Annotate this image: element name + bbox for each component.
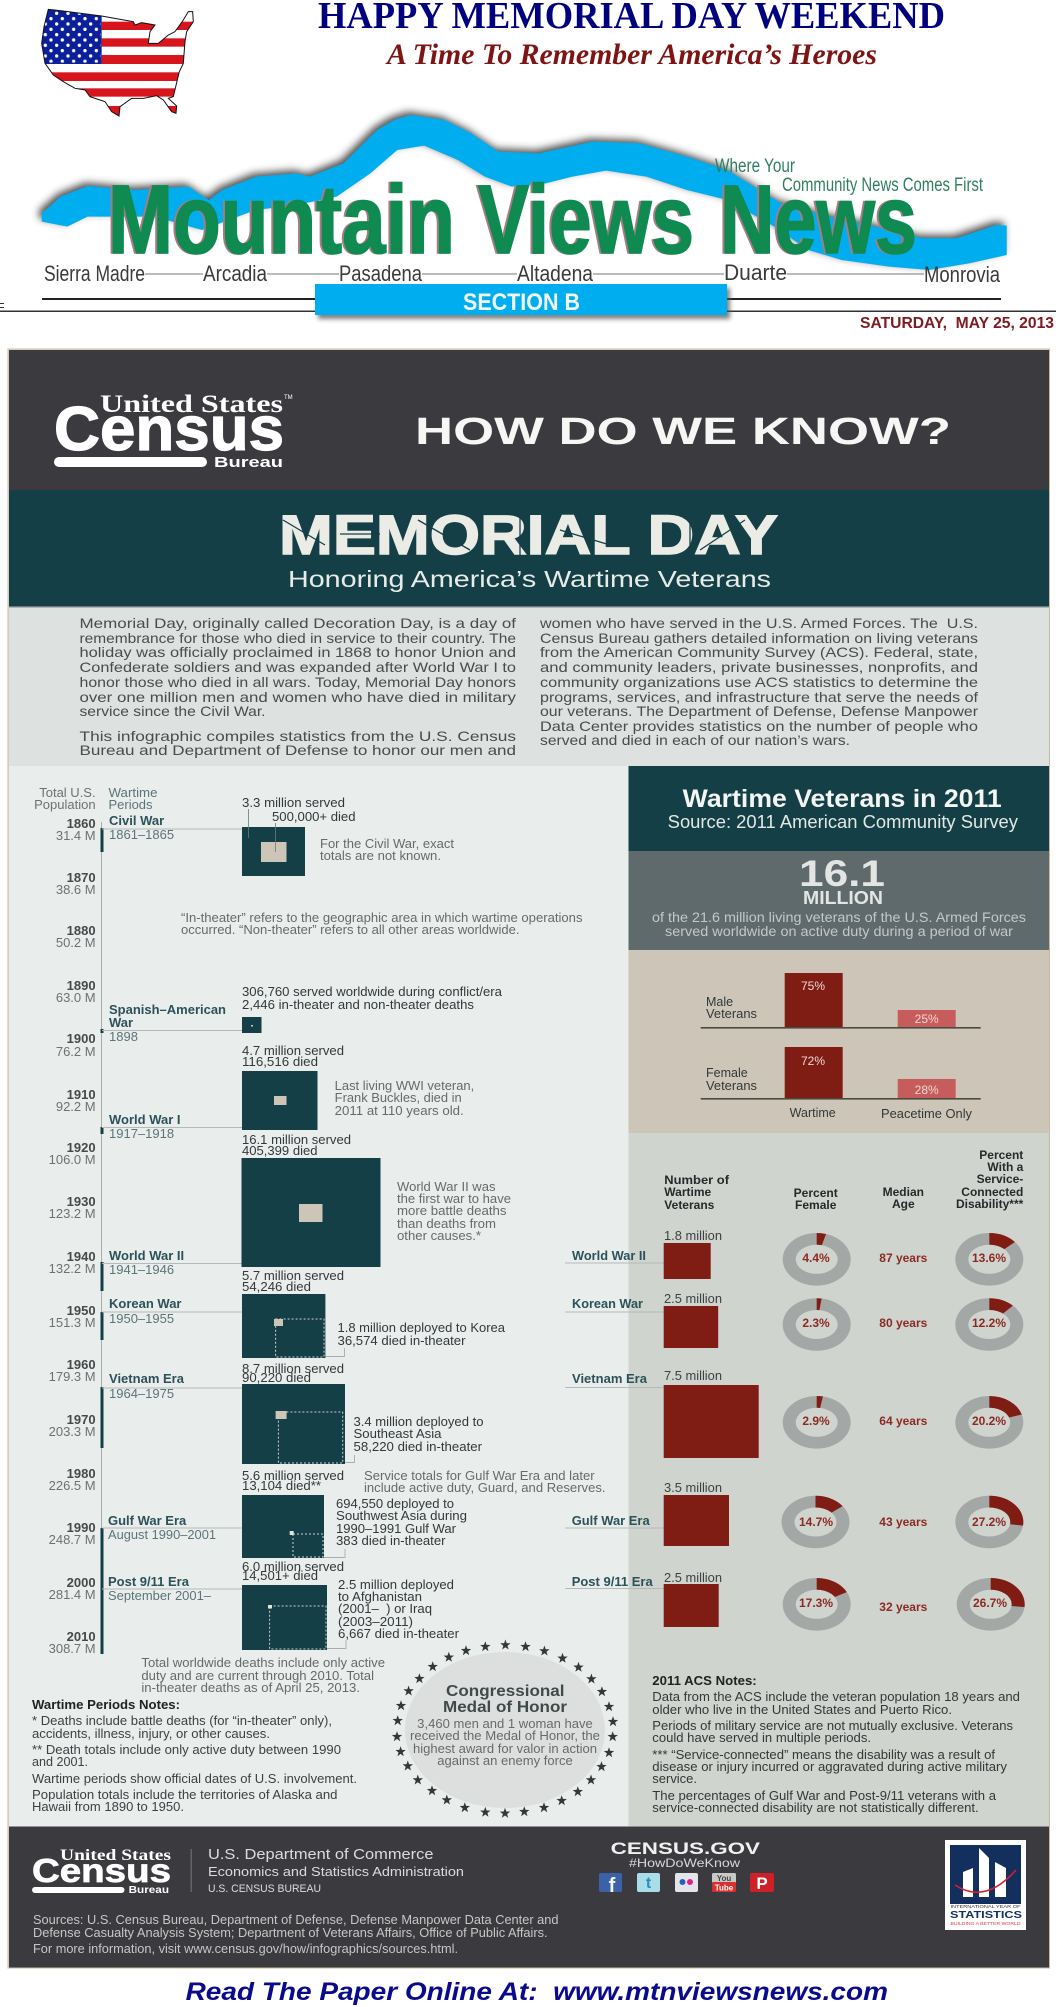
war period labels: Vietnam Era xyxy=(109,1371,185,1386)
male veterans bars: 25% xyxy=(915,1012,939,1026)
chart: Spanish-American War square xyxy=(242,985,502,1033)
population by decade: 123.2 M xyxy=(49,1206,96,1221)
text block: wartime periods notes: accidents, illness, injury, or other causes. xyxy=(32,1727,270,1741)
blue mountain swoosh xyxy=(39,112,1007,270)
department names xyxy=(208,1846,464,1895)
chart: Korean War square: 54,246 died xyxy=(242,1280,311,1294)
panel: Wartime Veterans in 2011 xyxy=(565,766,1049,1826)
tagline: Where Your xyxy=(715,156,796,177)
chart: Post 9/11 Era square: to Afghanistan xyxy=(338,1590,422,1604)
row: Korean War: 80 years xyxy=(879,1316,928,1330)
note: in-theater definition: occurred. “Non-theater” refers to all other areas worldwide. xyxy=(181,923,520,937)
population by decade: 1900 xyxy=(67,1031,96,1046)
icon: twitter: t xyxy=(646,1875,652,1892)
population by decade: 92.2 M xyxy=(56,1099,96,1114)
chart: Post 9/11 Era square: 6.0 million served xyxy=(242,1560,344,1574)
population by decade: 308.7 M xyxy=(49,1641,96,1656)
population by decade: 1930 xyxy=(67,1194,96,1209)
timeline column headers: Wartime xyxy=(108,785,158,800)
chart: Gulf War Era square: 5.6 million served xyxy=(242,1469,344,1483)
icon: YouTube: Tube xyxy=(715,1884,734,1892)
war period labels: 1917–1918 xyxy=(109,1126,174,1141)
population by decade: 50.2 M xyxy=(56,935,96,950)
town names line xyxy=(44,260,1001,287)
chart: World War I square: 2011 at 110 years old. xyxy=(335,1104,464,1118)
war period labels: World War II xyxy=(109,1248,184,1263)
intro left column: Confederate soldiers and was expanded after World War I to xyxy=(80,659,516,675)
chart: Post 9/11 Era square: 14,501+ died xyxy=(242,1569,318,1583)
chart: World War II square xyxy=(242,1133,511,1267)
logo: Census Bureau: TM xyxy=(284,395,293,401)
logo wordmark: Mountain xyxy=(106,165,453,274)
census.gov link: CENSUS.GOV xyxy=(611,1839,761,1858)
panel: introduction text xyxy=(9,606,1049,766)
panel: wartime periods timeline xyxy=(9,766,629,1827)
logo: International Year of Statistics: BUILDING A BETTER WORLD xyxy=(950,1921,1021,1926)
callout: Congressional Medal of Honor: received the Medal of Honor, the xyxy=(410,1729,600,1743)
male veterans bars: 75% xyxy=(801,979,825,993)
chart: World War II square: more battle deaths xyxy=(397,1204,506,1218)
war period labels: Post 9/11 Era xyxy=(108,1574,190,1589)
text block: 2011 ACS notes: service-connected disability are not statistically different. xyxy=(652,1801,979,1815)
logo: Census Bureau small: United States xyxy=(60,1847,171,1864)
intro left column: over one million men and women who have died in military xyxy=(80,689,516,705)
intro right column: our veterans. The Department of Defense, Defense Manpower xyxy=(540,703,978,719)
population by decade: 248.7 M xyxy=(49,1532,96,1547)
table column headers: With a xyxy=(987,1160,1024,1174)
chart: Gulf War Era square: 13,104 died** xyxy=(242,1479,321,1493)
tagline: Community News Comes First xyxy=(782,175,984,196)
timeline column headers: Total U.S. xyxy=(39,785,96,800)
text block: 2011 ACS notes: Periods of military service are not mutually exclusive. Veterans xyxy=(652,1719,1013,1733)
row: World War II: 1.8 million xyxy=(664,1229,722,1243)
chart: Civil War square: For the Civil War, exact xyxy=(320,837,455,851)
population by decade: 2000 xyxy=(67,1575,96,1590)
chart: Gulf War Era square: 1990–1991 Gulf War xyxy=(336,1522,456,1536)
icon: YouTube: You xyxy=(717,1874,731,1883)
town names line: Arcadia xyxy=(203,261,268,286)
female veterans bars xyxy=(701,1047,981,1100)
chart: Post 9/11 Era square: (2003–2011) xyxy=(338,1615,413,1629)
row: Vietnam Era: 2.9% xyxy=(802,1414,830,1428)
table column headers: Number of xyxy=(664,1173,730,1187)
row: Gulf War Era xyxy=(565,1481,1023,1548)
population by decade: 1940 xyxy=(67,1249,96,1264)
icon: facebook: f xyxy=(609,1875,616,1897)
chart: Civil War square: 500,000+ died xyxy=(272,810,356,824)
population by decade: 1970 xyxy=(67,1412,96,1427)
chart: Gulf War Era square xyxy=(242,1469,606,1558)
callout: Congressional Medal of Honor: Medal of Honor xyxy=(443,1699,567,1716)
callout: Congressional Medal of Honor: Congressional xyxy=(446,1683,565,1700)
chart: Spanish-American War square: 2,446 in-theater and non-theater deaths xyxy=(242,998,474,1012)
note: death totals: Total worldwide deaths include only active xyxy=(141,1656,385,1670)
logo wordmark: Mountain xyxy=(108,165,455,274)
logo: Census Bureau: Bureau xyxy=(214,454,283,471)
key stat: 16.1 million xyxy=(628,851,1049,950)
logo wordmark: Views xyxy=(478,165,694,274)
table column headers: Disability*** xyxy=(956,1197,1024,1211)
chart: Korean War square: 5.7 million served xyxy=(242,1269,344,1283)
table column headers: Connected xyxy=(961,1185,1023,1199)
population by decade xyxy=(49,816,96,1656)
key stat: 16.1 million: served worldwide on active duty during a period of war xyxy=(665,924,1014,939)
department names: Economics and Statistics Administration xyxy=(208,1864,464,1879)
icon: pinterest xyxy=(750,1873,774,1893)
row: Post 9/11 Era: 17.3% xyxy=(799,1596,833,1610)
row: Post 9/11 Era xyxy=(565,1571,1025,1631)
table column headers: Wartime xyxy=(664,1185,712,1199)
text block: 2011 ACS notes: 2011 ACS Notes: xyxy=(652,1673,757,1688)
chart: Vietnam Era square: 90,220 died xyxy=(242,1371,311,1385)
town names line: Pasadena xyxy=(339,261,423,286)
sources text: Defense Casualty Analysis System; Department of Veterans Affairs, Office of Public Affairs. xyxy=(33,1926,548,1940)
war period labels xyxy=(108,813,226,1603)
masthead subtitle: A Time To Remember America’s Heroes xyxy=(385,38,877,71)
note: death totals: in-theater deaths as of April 25, 2013. xyxy=(141,1681,360,1695)
intro right column xyxy=(539,615,978,748)
logo wordmark: News xyxy=(720,165,917,274)
callout: Congressional Medal of Honor xyxy=(392,1640,618,1818)
war period labels: Civil War xyxy=(109,813,164,828)
infographic panel xyxy=(8,349,1050,1968)
row: World War II: 87 years xyxy=(879,1251,928,1265)
chart: World War I square: 4.7 million served xyxy=(242,1044,344,1058)
icon: YouTube xyxy=(712,1873,736,1892)
key stat: 16.1 million: 16.1 xyxy=(799,853,885,894)
note: death totals xyxy=(141,1656,385,1695)
population by decade: 1920 xyxy=(67,1140,96,1155)
logo: Census Bureau: United States xyxy=(100,391,283,418)
female veterans bars: 72% xyxy=(801,1054,825,1068)
table column headers: Female xyxy=(795,1198,837,1212)
female veterans bars: 28% xyxy=(915,1083,939,1097)
logo wordmark: News xyxy=(718,165,915,274)
text block: 2011 ACS notes: could have served in multiple periods. xyxy=(652,1731,871,1745)
population by decade: 1990 xyxy=(67,1520,96,1535)
timeline column headers: Population xyxy=(34,797,96,812)
note: in-theater definition: “In-theater” refers to the geographic area in which wartime operations xyxy=(181,911,582,925)
war period labels: 1964–1975 xyxy=(109,1386,174,1401)
chart: World War I square: Last living WWI veteran, xyxy=(335,1079,474,1093)
intro right column: Data Center provides statistics on the number of people who xyxy=(540,718,978,734)
chart: World War II square: the first war to have xyxy=(397,1192,511,1206)
war period labels: 1898 xyxy=(109,1029,138,1044)
intro left column: Memorial Day, originally called Decoration Day, is a day of xyxy=(80,615,516,631)
war period labels: 1941–1946 xyxy=(109,1262,174,1277)
chart: Gulf War Era square: Southwest Asia during xyxy=(336,1509,467,1523)
row: Korean War xyxy=(565,1292,1023,1351)
row: Korean War: 12.2% xyxy=(972,1316,1006,1330)
row: Gulf War Era: Gulf War Era xyxy=(572,1513,650,1528)
ring of stars xyxy=(392,1640,618,1818)
text block: 2011 ACS notes xyxy=(652,1673,1020,1815)
chart: Korean War square: 1.8 million deployed to Korea xyxy=(338,1321,505,1335)
intro left column xyxy=(80,615,516,758)
row: Gulf War Era: 43 years xyxy=(879,1515,928,1529)
population by decade: 132.2 M xyxy=(49,1261,96,1276)
text block: wartime periods notes: Wartime Periods Notes: xyxy=(32,1697,180,1712)
population by decade: 31.4 M xyxy=(56,828,96,843)
population by decade: 226.5 M xyxy=(49,1478,96,1493)
chart: Korean War square xyxy=(242,1269,505,1358)
section B banner xyxy=(315,284,730,319)
heading block: Wartime Veterans in 2011 xyxy=(683,785,1002,813)
logo wordmark: Views xyxy=(476,165,692,274)
chart: World War I square: Frank Buckles, died in xyxy=(335,1091,462,1105)
table column headers: Median xyxy=(883,1185,924,1199)
text block: wartime periods notes: Population totals include the territories of Alaska and xyxy=(32,1788,338,1802)
logo: International Year of Statistics xyxy=(945,1840,1026,1930)
intro left column: holiday was officially proclaimed in 1868 to honor Union and xyxy=(80,644,516,660)
intro right column: and community leaders, private businesses, nonprofits, and xyxy=(540,659,978,675)
text block: wartime periods notes: Wartime periods show official dates of U.S. involvement. xyxy=(32,1772,357,1786)
chart: World War II square: 16.1 million served xyxy=(242,1133,351,1147)
war period labels: Korean War xyxy=(109,1296,181,1311)
chart: Gulf War Era square: include active duty, Guard, and Reserves. xyxy=(364,1481,606,1495)
table column headers xyxy=(664,1148,1024,1212)
icon: facebook xyxy=(599,1873,622,1897)
text block: 2011 ACS notes: disease or injury incurred or aggravated during active military xyxy=(652,1760,1008,1774)
table column headers: Veterans xyxy=(664,1198,715,1212)
chart: Civil War square: 3.3 million served xyxy=(242,796,345,810)
table column headers: Percent xyxy=(794,1186,838,1200)
intro right column: programs, services, and infrastructure that serve the needs of xyxy=(540,689,978,705)
intro left column: service since the Civil War. xyxy=(80,703,266,719)
row: Vietnam Era: 7.5 million xyxy=(664,1369,722,1383)
text block: 2011 ACS notes: The percentages of Gulf War and Post-9/11 veterans with a xyxy=(652,1789,996,1803)
population by decade: 1880 xyxy=(67,923,96,938)
logo: Census Bureau small: Census xyxy=(32,1852,171,1889)
chart: Gulf War Era square: 383 died in-theater xyxy=(336,1534,446,1548)
row: Vietnam Era: 20.2% xyxy=(972,1414,1006,1428)
icon: flickr xyxy=(675,1873,698,1892)
chart: Spanish-American War square: 306,760 served worldwide during conflict/era xyxy=(242,985,502,999)
heading: Memorial Day: MEMORIAL DAY xyxy=(279,503,778,566)
row: World War II: 13.6% xyxy=(972,1251,1006,1265)
row: Vietnam Era: 64 years xyxy=(879,1414,928,1428)
chart: World War II square: 405,399 died xyxy=(242,1144,318,1158)
timeline column headers: Periods xyxy=(108,797,153,812)
issue date: SATURDAY, MAY 25, 2013 xyxy=(860,315,1054,332)
chart: Gulf War Era square: Service totals for Gulf War Era and later xyxy=(364,1469,595,1483)
female veterans bars: Veterans xyxy=(706,1079,757,1093)
icon: twitter xyxy=(637,1873,660,1892)
chart: World War II square: other causes.* xyxy=(397,1229,481,1243)
war period labels: World War I xyxy=(109,1112,180,1127)
population by decade: 203.3 M xyxy=(49,1424,96,1439)
callout: Congressional Medal of Honor: against an enemy force xyxy=(437,1754,573,1768)
key stat: 16.1 million: MILLION xyxy=(803,888,883,908)
row: Vietnam Era: Vietnam Era xyxy=(572,1371,648,1386)
timeline axis xyxy=(100,822,242,1654)
row: Korean War: 2.5 million xyxy=(664,1292,722,1306)
sources text: For more information, visit www.census.gov/how/infographics/sources.html. xyxy=(33,1942,458,1956)
town names line: Monrovia xyxy=(924,262,1001,287)
intro right column: women who have served in the U.S. Armed Forces. The U.S. xyxy=(539,615,978,631)
row: Post 9/11 Era: 26.7% xyxy=(973,1596,1007,1610)
key stat: 16.1 million: of the 21.6 million living veterans of the U.S. Armed Forces xyxy=(652,910,1026,925)
chart: Korean War square: 36,574 died in-theater xyxy=(338,1334,466,1348)
chart: Gulf War Era square: 694,550 deployed to xyxy=(336,1497,454,1511)
town names line: Sierra Madre xyxy=(44,261,145,286)
row: Gulf War Era: 27.2% xyxy=(972,1515,1006,1529)
text block: wartime periods notes: Hawaii from 1890 to 1950. xyxy=(32,1800,184,1814)
bar chart: wartime vs peacetime: Peacetime Only xyxy=(881,1107,973,1121)
population by decade: 1950 xyxy=(67,1303,96,1318)
population by decade: 1960 xyxy=(67,1357,96,1372)
intro left column: honor those who died in all wars. Today, Memorial Day honors xyxy=(80,674,516,690)
row: Vietnam Era xyxy=(565,1369,1023,1458)
census.gov link: #HowDoWeKnow xyxy=(629,1856,740,1870)
chart: World War II square: World War II was xyxy=(397,1180,496,1194)
population by decade: 151.3 M xyxy=(49,1315,96,1330)
panel: Memorial Day title xyxy=(9,490,1049,607)
subtitle: Honoring America’s Wartime Veterans xyxy=(288,566,771,592)
logo: Mountain Views News xyxy=(39,112,1007,274)
chart: Vietnam Era square: Southeast Asia xyxy=(354,1427,442,1441)
bar chart: wartime vs peacetime xyxy=(628,950,1049,1133)
war period labels: August 1990–2001 xyxy=(108,1527,216,1542)
heading block: Source: 2011 American Community Survey xyxy=(668,812,1018,832)
population by decade: 1860 xyxy=(67,816,96,831)
chart: Vietnam Era square xyxy=(242,1362,484,1464)
row: Post 9/11 Era: 32 years xyxy=(879,1600,928,1614)
text block: 2011 ACS notes: Data from the ACS include the veteran population 18 years and xyxy=(652,1690,1020,1704)
row: World War II: World War II xyxy=(572,1248,646,1263)
logo: Census Bureau: Census xyxy=(54,395,284,464)
sources text xyxy=(33,1913,559,1956)
chart: World War II square: than deaths from xyxy=(397,1217,496,1231)
war period labels: Gulf War Era xyxy=(108,1513,187,1528)
row: Korean War: 2.3% xyxy=(802,1316,830,1330)
logo: International Year of Statistics: STATISTICS xyxy=(950,1909,1022,1921)
population by decade: 1910 xyxy=(67,1087,96,1102)
intro right column: served and died in each of our nation’s wars. xyxy=(540,732,850,748)
row: World War II xyxy=(565,1229,1023,1286)
panel: footer xyxy=(9,1826,1049,1968)
chart: Post 9/11 Era square: (2001– ) or Iraq xyxy=(338,1602,432,1616)
department names: U.S. CENSUS BUREAU xyxy=(208,1883,321,1895)
population by decade: 281.4 M xyxy=(49,1587,96,1602)
chart: World War I square xyxy=(242,1044,474,1130)
logo: International Year of Statistics: INTERNATIONAL YEAR OF xyxy=(950,1904,1021,1909)
war period labels: Spanish–American xyxy=(109,1002,226,1017)
male veterans bars: Veterans xyxy=(706,1007,757,1021)
text block: wartime periods notes: and 2001. xyxy=(32,1755,88,1769)
population by decade: 1890 xyxy=(67,978,96,993)
census.gov link xyxy=(611,1839,761,1870)
town names line: Altadena xyxy=(517,261,594,286)
population by decade: 76.2 M xyxy=(56,1044,96,1059)
intro right column: community organizations use ACS statistics to determine the xyxy=(540,674,978,690)
population by decade: 106.0 M xyxy=(49,1152,96,1167)
war period labels: 1861–1865 xyxy=(109,827,174,842)
chart: World War I square: 116,516 died xyxy=(242,1055,318,1069)
population by decade: 2010 xyxy=(67,1629,96,1644)
war period labels: September 2001– xyxy=(108,1588,212,1603)
row: World War II: 4.4% xyxy=(802,1251,830,1265)
chart: Vietnam Era square: 3.4 million deployed to xyxy=(354,1415,484,1429)
panel: header How Do We Know xyxy=(9,350,1049,490)
row: Korean War: Korean War xyxy=(572,1296,643,1311)
intro right column: from the American Community Survey (ACS). Federal, state, xyxy=(540,644,978,660)
logo wordmark xyxy=(106,165,917,274)
section B banner: SECTION B xyxy=(463,289,580,316)
text block: 2011 ACS notes: service. xyxy=(652,1772,697,1786)
population by decade: 179.3 M xyxy=(49,1369,96,1384)
text block: 2011 ACS notes: *** “Service-connected” means the disability was a result of xyxy=(652,1748,996,1762)
table column headers: Age xyxy=(892,1197,915,1211)
text block: wartime periods notes xyxy=(32,1697,357,1814)
department names: U.S. Department of Commerce xyxy=(208,1846,434,1863)
population by decade: 38.6 M xyxy=(56,882,96,897)
heading: How do we know: HOW DO WE KNOW? xyxy=(415,411,951,453)
war period labels: 1950–1955 xyxy=(109,1311,174,1326)
chart: Post 9/11 Era square xyxy=(242,1560,459,1650)
bar chart: wartime vs peacetime: Wartime xyxy=(790,1106,836,1120)
callout: Congressional Medal of Honor: 3,460 men and 1 woman have xyxy=(417,1717,593,1731)
row: Gulf War Era: 14.7% xyxy=(799,1515,833,1529)
row: Post 9/11 Era: Post 9/11 Era xyxy=(572,1574,653,1589)
table column headers: Service- xyxy=(977,1172,1023,1186)
logo: Census Bureau small xyxy=(32,1847,171,1896)
callout: Congressional Medal of Honor: highest award for valor in action xyxy=(413,1742,597,1756)
intro right column: Census Bureau gathers detailed information on living veterans xyxy=(540,630,978,646)
note: death totals: duty and are current through 2010. Total xyxy=(141,1669,374,1683)
town names line: Duarte xyxy=(724,260,787,285)
tagline xyxy=(715,156,984,196)
row: Gulf War Era: 3.5 million xyxy=(664,1481,722,1495)
intro left column: This infographic compiles statistics from the U.S. Census xyxy=(80,728,516,744)
chart: Vietnam Era square: 8.7 million served xyxy=(242,1362,344,1376)
population by decade: 1870 xyxy=(67,870,96,885)
male veterans bars xyxy=(701,973,981,1029)
logo: Census Bureau small: Bureau xyxy=(129,1885,169,1896)
war period labels: War xyxy=(109,1015,133,1030)
icon: pinterest: P xyxy=(756,1874,768,1893)
sources text: Sources: U.S. Census Bureau, Department of Defense, Defense Manpower Data Center and xyxy=(33,1913,559,1927)
chart: Civil War square xyxy=(242,796,455,876)
table column headers: Percent xyxy=(979,1148,1023,1162)
note: in-theater definition xyxy=(181,911,582,937)
chart: Civil War square: totals are not known. xyxy=(320,849,441,863)
intro left column: remembrance for those who died in service to their country. The xyxy=(80,630,516,646)
female veterans bars: Female xyxy=(706,1066,748,1080)
timeline column headers xyxy=(34,785,158,812)
male veterans bars: Male xyxy=(706,995,733,1009)
text block: 2011 ACS notes: older who live in the United States and Puerto Rico. xyxy=(652,1703,952,1717)
population by decade: 63.0 M xyxy=(56,990,96,1005)
text block: wartime periods notes: ** Death totals include only active duty between 1990 xyxy=(32,1743,341,1757)
heading block xyxy=(628,766,1049,851)
chart: Vietnam Era square: 58,220 died in-theater xyxy=(354,1440,482,1454)
row: Post 9/11 Era: 2.5 million xyxy=(664,1571,722,1585)
table: veterans by era xyxy=(565,1133,1049,1826)
chart: Post 9/11 Era square: 2.5 million deployed xyxy=(338,1578,454,1592)
intro left column: Bureau and Department of Defense to honor our men and xyxy=(80,742,516,758)
footer link line: Read The Paper Online At: www.mtnviewsnews.com xyxy=(186,1978,888,2006)
text block: wartime periods notes: * Deaths include battle deaths (for “in-theater” only), xyxy=(32,1714,332,1728)
chart: Post 9/11 Era square: 6,667 died in-theater xyxy=(338,1627,459,1641)
population by decade: 1980 xyxy=(67,1466,96,1481)
icon: US map flag xyxy=(41,8,194,117)
